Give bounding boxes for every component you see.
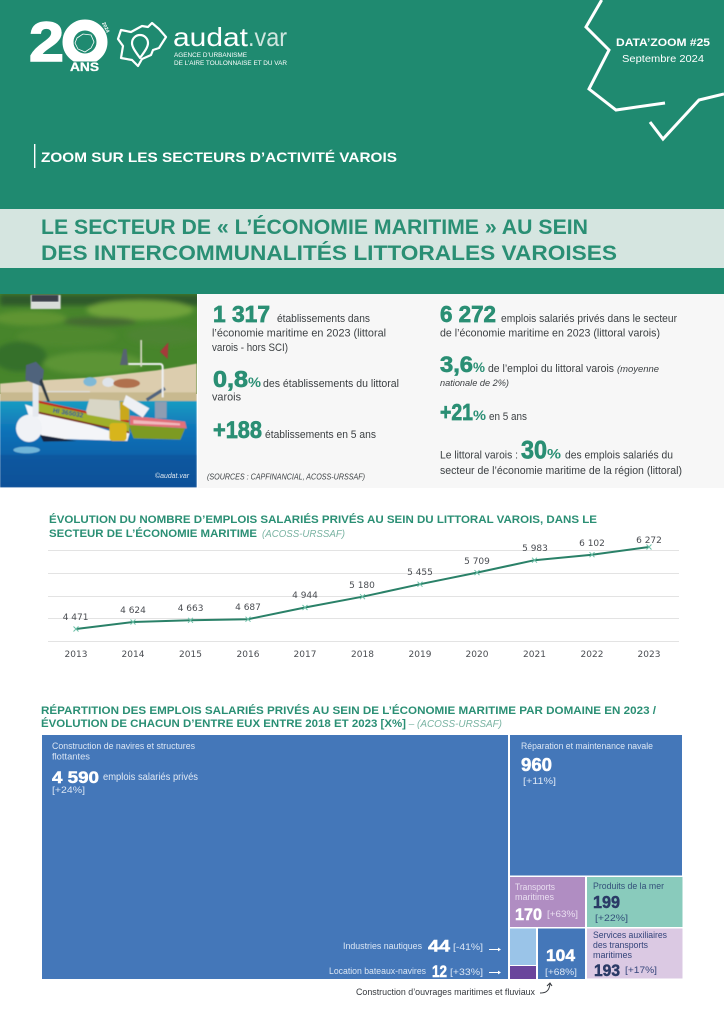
tile: produits de la mer: Produits de la mer	[593, 881, 664, 891]
stat: 30 %: secteur de l’économie maritime de la région (littoral)	[440, 465, 682, 477]
tile: construction de navires: [+24%]	[52, 785, 85, 795]
tile: location bateaux-navires	[510, 966, 536, 979]
tile: transports maritimes: [+63%]	[547, 909, 578, 919]
value labels: 4 663	[178, 604, 203, 614]
year axis: 2018	[351, 650, 374, 660]
second hull	[128, 424, 185, 440]
stat: 1 317 establishments: établissements dans	[277, 313, 370, 325]
tile: réparation navale: 960	[521, 755, 552, 775]
issue label: Septembre 2024	[622, 53, 704, 65]
stat: +21 %	[440, 399, 527, 425]
tile: réparation navale: Réparation et maintenance navale	[521, 741, 653, 751]
year axis: 2020	[466, 650, 489, 660]
yellow fender	[109, 423, 127, 441]
tile: construction de navires	[42, 735, 508, 981]
logo: audat.var wordmark: DE L’AIRE TOULONNAISE ET DU VAR	[174, 60, 288, 67]
tile: transports maritimes: maritimes	[515, 892, 554, 902]
stat: 0,8 %: 0,8	[213, 366, 248, 392]
stat: 1 317 establishments	[212, 301, 386, 354]
year axis: 2015	[179, 650, 202, 660]
logo: 20 ans	[29, 10, 110, 74]
logo: audat.var wordmark: AGENCE D’URBANISME	[174, 52, 247, 59]
year axis: 2021	[523, 650, 546, 660]
heading: line chart: SECTEUR DE L’ÉCONOMIE MARITIME	[49, 527, 257, 540]
sources note: (SOURCES : CAPFINANCIAL, ACOSS-URSSAF)	[207, 472, 365, 482]
stat: +21 %: en 5 ans	[489, 411, 527, 423]
stat: 1 317 establishments: varois - hors SCI)	[212, 342, 288, 354]
tile: réparation navale	[510, 735, 682, 876]
label: location bateaux-navires: 12	[432, 962, 447, 981]
stat: 30 %: 30	[521, 436, 547, 464]
heading: treemap: ÉVOLUTION DE CHACUN D’ENTRE EUX ENTRE 2018 ET 2023 [X%]	[41, 717, 406, 730]
heading: line chart	[49, 513, 597, 540]
year axis: 2014	[122, 650, 145, 660]
stat: 3,6 %: 3,6	[440, 352, 473, 377]
label: industries nautiques: [-41%]	[453, 942, 483, 952]
logo: map pin icon	[118, 23, 166, 66]
issue label: DATA’ZOOM #25	[616, 37, 710, 49]
stat: 6 272 jobs	[440, 301, 677, 340]
stat: 30 %	[440, 436, 682, 477]
tile: transports maritimes: Transports	[515, 882, 555, 892]
photo: boat at sea: HI 365032	[52, 407, 84, 420]
tile: transports maritimes	[510, 877, 585, 927]
title band	[0, 209, 724, 268]
label: location bateaux-navires: [+33%]	[450, 967, 483, 977]
year axis	[65, 650, 660, 660]
value labels: 5 709	[464, 557, 490, 567]
stat: 3,6 %: (moyenne	[617, 364, 659, 374]
tile: services auxiliaires: maritimes	[593, 950, 632, 960]
stat: 0,8 %	[212, 366, 399, 404]
mast	[33, 373, 39, 417]
stat: +188: établissements en 5 ans	[265, 429, 376, 441]
treemap: jobs by domain	[42, 735, 682, 981]
value labels	[63, 536, 662, 623]
callout: construction d'ouvrages: Construction d’ouvrages maritimes et fluviaux	[356, 987, 535, 998]
stat: 1 317 establishments: l’économie maritime en 2023 (littoral	[212, 328, 386, 340]
tile: produits de la mer: 199	[593, 892, 620, 912]
stat: 30 %: des emplois salariés du	[565, 450, 673, 462]
year axis: 2016	[237, 650, 260, 660]
stat: 3,6 %: nationale de 2%)	[440, 378, 509, 388]
tile: construction de navires: flottantes	[52, 752, 91, 762]
stat: +21 %: %	[473, 407, 487, 423]
tile: réparation navale: [+11%]	[523, 776, 556, 786]
section heading: ZOOM SUR LES SECTEURS D’ACTIVITÉ VAROIS	[41, 149, 397, 165]
logo: 20 ans: ANS	[70, 60, 99, 74]
value labels: 5 455	[407, 568, 433, 578]
tile: produits de la mer	[587, 877, 682, 927]
year axis: 2017	[294, 650, 316, 660]
year axis: 2023	[638, 650, 660, 660]
stat: 0,8 %: varois	[212, 392, 241, 404]
heading: treemap: RÉPARTITION DES EMPLOIS SALARIÉS PRIVÉS AU SEIN DE L’ÉCONOMIE MARITIME PAR DOMAINE EN 2023 /	[41, 704, 656, 717]
stat: +188: +188	[213, 417, 262, 444]
logo: audat.var wordmark: .var	[248, 22, 287, 52]
label: location bateaux-navires	[329, 962, 501, 981]
tile: construction de navires: emplois salariés privés	[103, 772, 198, 783]
value labels: 6 102	[579, 539, 605, 549]
decorative speech outline	[586, 0, 724, 139]
panel: key figures	[198, 294, 724, 488]
stat: 3,6 %	[440, 352, 659, 388]
logo: 20 ans: 2024	[100, 21, 110, 34]
value labels: 4 471	[63, 613, 88, 623]
year axis: 2019	[409, 650, 432, 660]
stat: +188	[213, 417, 376, 444]
heading: treemap: – (ACOSS-URSSAF)	[406, 719, 502, 730]
photo: boat at sea	[0, 294, 210, 488]
tile: services auxiliaires: Services auxiliaires	[593, 930, 667, 940]
data markers	[74, 544, 652, 632]
value labels: 5 983	[522, 544, 548, 554]
stat: 0,8 %: des établissements du littoral	[263, 378, 399, 390]
photo credit: ©audat.var	[155, 472, 190, 480]
panel: green header	[0, 0, 724, 294]
tile: construction d'ouvrages: [+68%]	[545, 967, 577, 977]
logo: 20 ans: 2	[29, 10, 64, 73]
value labels: 6 272	[636, 536, 662, 546]
tile: transports maritimes: 170	[515, 905, 542, 924]
stat: 0,8 %: %	[248, 374, 262, 390]
buoy	[16, 415, 42, 442]
stat: 6 272 jobs: emplois salariés privés dans le secteur	[501, 313, 677, 325]
stat: 30 %: %	[547, 446, 562, 462]
issue label	[616, 37, 710, 65]
stat: 6 272 jobs: de l’économie maritime en 2023 (littoral varois)	[440, 328, 660, 340]
line chart: salaried jobs 2013-2023	[48, 536, 679, 660]
value labels: 4 624	[120, 606, 146, 616]
tile: produits de la mer: [+22%]	[595, 913, 628, 923]
stat: 3,6 %: %	[473, 359, 486, 375]
year axis: 2013	[65, 650, 87, 660]
tile: construction d'ouvrages: 104	[546, 946, 576, 965]
stat: +21 %: +21	[440, 399, 473, 425]
value labels: 4 687	[235, 603, 261, 613]
label: industries nautiques	[343, 936, 501, 956]
tile: construction d'ouvrages	[538, 928, 585, 979]
logo: audat.var wordmark	[173, 22, 288, 67]
heading: treemap	[41, 704, 656, 730]
data line	[76, 547, 649, 629]
year axis: 2022	[581, 650, 603, 660]
arrow	[540, 983, 552, 993]
title band: LE SECTEUR DE « L’ÉCONOMIE MARITIME » AU SEIN	[41, 216, 588, 239]
tile: services auxiliaires: 193	[594, 961, 620, 980]
label: location bateaux-navires: Location bateaux-navires	[329, 966, 426, 976]
superstructure	[86, 399, 121, 421]
tile: services auxiliaires: des transports	[593, 940, 648, 950]
tile: construction de navires: 4 590	[52, 768, 99, 787]
stat: 1 317 establishments: 1 317	[213, 301, 270, 327]
value labels: 4 944	[292, 591, 318, 601]
value labels: 5 180	[349, 581, 375, 591]
logo: audat.var wordmark: audat	[173, 22, 249, 52]
label: industries nautiques: 44	[428, 936, 451, 956]
tile: services auxiliaires: [+17%]	[625, 965, 657, 975]
white hull	[25, 404, 130, 441]
tile: services auxiliaires	[587, 928, 682, 980]
label: industries nautiques: Industries nautiques	[343, 941, 422, 951]
heading: line chart: (ACOSS-URSSAF)	[262, 529, 345, 540]
title band: DES INTERCOMMUNALITÉS LITTORALES VAROISES	[41, 242, 617, 265]
heading: line chart: ÉVOLUTION DU NOMBRE D’EMPLOIS SALARIÉS PRIVÉS AU SEIN DU LITTORAL VAROIS, DANS LE	[49, 513, 597, 526]
tile: industries nautiques	[510, 928, 536, 965]
stat: 30 %: Le littoral varois :	[440, 450, 518, 462]
stat: 3,6 %: de l’emploi du littoral varois	[488, 363, 614, 375]
stat: 6 272 jobs: 6 272	[440, 301, 496, 327]
tile: construction de navires: Construction de navires et structures	[52, 741, 195, 751]
